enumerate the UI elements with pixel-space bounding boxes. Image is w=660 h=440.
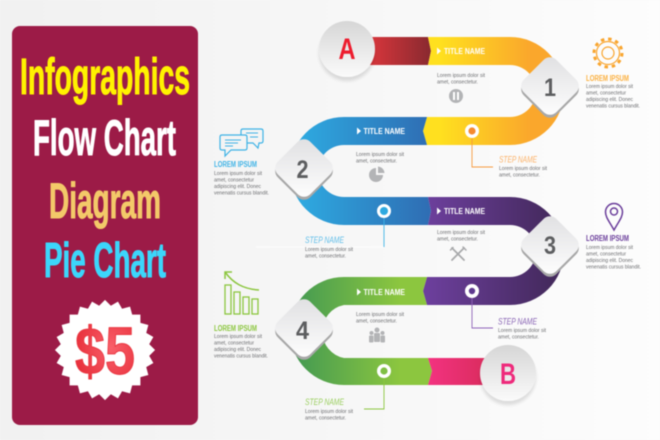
- heading: Pie Chart: Pie Chart: [44, 234, 166, 288]
- side text: right 3: [586, 234, 641, 270]
- step: blue: [256, 204, 391, 260]
- heading: Diagram: Diagram: [49, 173, 161, 229]
- side text: left 4: amet, consectetur: [214, 340, 254, 346]
- node B: [480, 345, 536, 401]
- side text: left 4: adipiscing elit. Donec: [214, 347, 261, 353]
- diamond 1: 1: [544, 74, 556, 102]
- flow path: [290, 37, 564, 385]
- title 3: TITLE NAME: [444, 206, 485, 216]
- diamond 2: [271, 135, 337, 204]
- side text: right 3: venenatis cursus blandit.: [586, 264, 641, 270]
- side text: right 3: LOREM IPSUM: [586, 234, 629, 243]
- segment: purple curve: [423, 197, 564, 305]
- side text: left 4: Lorem ipsum dolor sit: [214, 334, 263, 340]
- title names: [357, 46, 485, 297]
- price badge: [55, 300, 155, 400]
- segment: green curve: [290, 277, 432, 385]
- text block 1: [437, 73, 486, 86]
- segment: blue curve: [290, 117, 431, 225]
- side text: right 3: amet, consectetur: [586, 252, 626, 258]
- side text: left 2: adipiscing elit. Donec: [214, 184, 261, 190]
- side text: right top: Lorem ipsum dolor sit: [586, 84, 634, 90]
- side text: right top: LOREM IPSUM: [586, 74, 629, 83]
- icon: tools: [450, 247, 466, 260]
- segment: red start: [360, 37, 431, 65]
- text block 4: Lorem ipsum dolor sit: [356, 312, 405, 318]
- title 2: TITLE NAME: [364, 126, 405, 136]
- diamond 3: [517, 212, 583, 281]
- step: orange: amet, consectetur.: [499, 172, 540, 178]
- step: green: STEP NAME: [305, 397, 345, 407]
- text block 1: Lorem ipsum dolor sit: [437, 73, 486, 79]
- diamond 2: 2: [296, 156, 308, 184]
- text block 3: Lorem ipsum dolor sit: [437, 230, 486, 236]
- side text: right 3: adipiscing elit. Donec: [586, 258, 633, 264]
- side text: left 2: [214, 160, 269, 196]
- heading: Infographics: Infographics: [20, 48, 190, 105]
- side text: left 4: venenatis cursus blandit.: [214, 354, 268, 360]
- icon: chat bubbles: [220, 129, 263, 156]
- step: purple: Lorem ipsum dolor sit: [498, 328, 547, 334]
- diamond 4: 4: [296, 317, 309, 345]
- text block 4: amet, consectetur.: [356, 318, 397, 324]
- step: orange: STEP NAME: [499, 154, 538, 164]
- node A: A: [338, 33, 356, 66]
- diamond 3: 3: [544, 232, 556, 260]
- side text: left 2: LOREM IPSUM: [214, 160, 257, 169]
- side text: right top: adipiscing elit. Donec: [586, 97, 633, 103]
- node B: B: [500, 358, 516, 391]
- step: purple: amet, consectetur.: [498, 334, 539, 340]
- text block 3: [437, 230, 486, 242]
- segment: pink end: [428, 358, 495, 385]
- text block 3: amet, consectetur.: [437, 236, 478, 242]
- diamond 4: [271, 295, 337, 364]
- text block 2: Lorem ipsum dolor sit: [356, 152, 405, 158]
- icon: pause: [449, 89, 463, 103]
- side text: right top: venenatis cursus blandit.: [586, 104, 640, 110]
- title 1: TITLE NAME: [444, 46, 485, 56]
- text block 2: amet, consectetur.: [356, 158, 397, 164]
- heading: Flow Chart: Flow Chart: [33, 110, 176, 166]
- segment: yellow curve: [423, 37, 564, 145]
- step: purple: [465, 284, 547, 340]
- step: purple: STEP NAME: [498, 316, 538, 326]
- step: orange: Lorem ipsum dolor sit: [499, 166, 548, 172]
- icon: pie chart: [369, 166, 384, 182]
- side text: left 2: venenatis cursus blandit.: [214, 190, 269, 196]
- diamond 1: [517, 53, 583, 122]
- side text: left 2: Lorem ipsum dolor sit: [214, 171, 263, 177]
- step: blue: amet, consectetur.: [305, 254, 346, 260]
- side text: right 3: Lorem ipsum dolor sit: [586, 245, 634, 251]
- step: blue: STEP NAME: [305, 235, 345, 245]
- side text: left 4: LOREM IPSUM: [214, 324, 257, 333]
- step: blue: Lorem ipsum dolor sit: [305, 247, 354, 253]
- text block 2: [356, 152, 405, 164]
- step: green: Lorem ipsum dolor sit: [305, 409, 354, 415]
- step: green: [305, 364, 391, 422]
- title 4: TITLE NAME: [364, 287, 405, 297]
- icon: bar chart with arrow: [225, 272, 259, 314]
- side text: left 4: [214, 324, 268, 360]
- side text: right top: [586, 74, 640, 110]
- price badge: $5: [75, 314, 135, 389]
- text block 4: [356, 312, 405, 324]
- panel: promo: [12, 26, 198, 425]
- icon: location pin: [606, 204, 622, 230]
- side text: right top: amet, consectetur: [586, 90, 626, 96]
- node A: [319, 21, 375, 77]
- side text: left 2: amet, consectetur: [214, 178, 254, 184]
- icon: gear: [594, 39, 622, 67]
- text block 1: amet, consectetur.: [437, 80, 478, 86]
- step: green: amet, consectetur.: [305, 416, 346, 422]
- icon: people: [369, 328, 385, 342]
- step: orange: [465, 124, 548, 178]
